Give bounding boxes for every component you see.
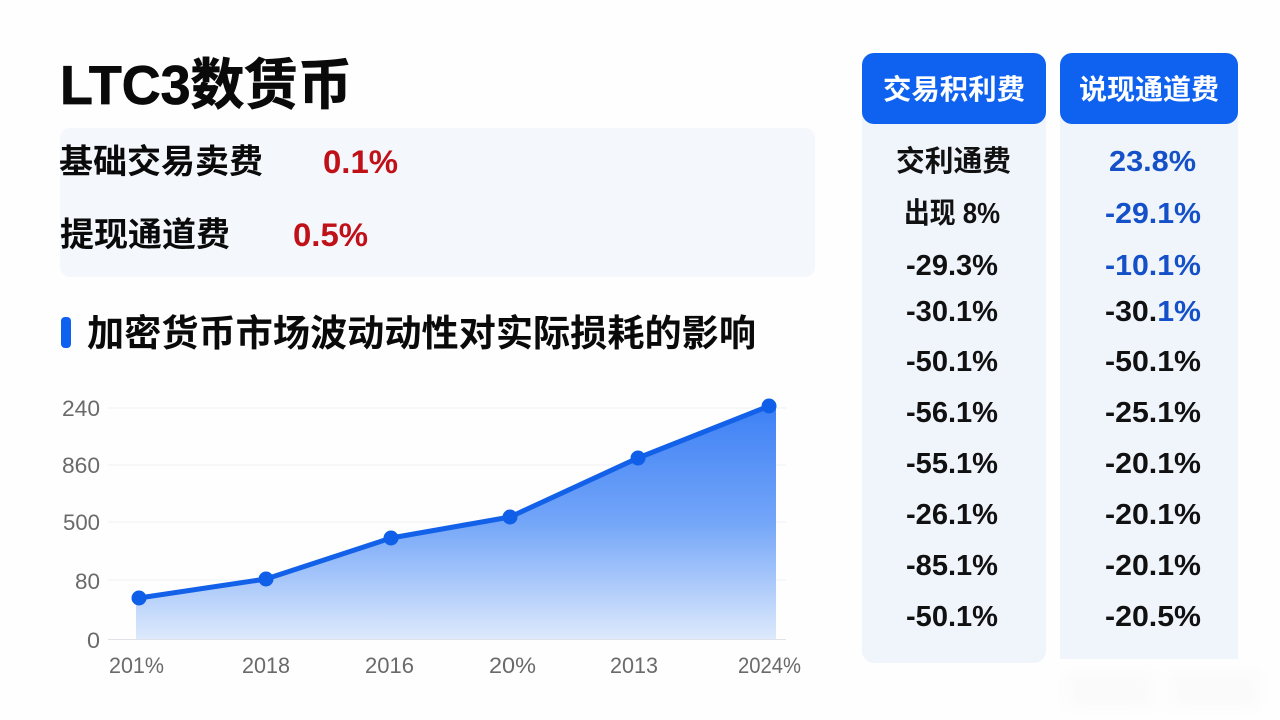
column header [1060, 53, 1238, 124]
text: withdrawal channel fee: 提现通道费 [60, 217, 230, 254]
column header: 说现通道费 [1079, 74, 1219, 105]
y axis labels: 500 [63, 510, 100, 535]
column values: -10.1% [1105, 250, 1201, 282]
column values: -30.1% [906, 296, 998, 328]
column values: -50.1% [1105, 346, 1201, 378]
column: withdrawal fee [1060, 53, 1238, 659]
x axis labels: 2024% [738, 653, 801, 678]
y axis labels: 0 [87, 628, 100, 653]
title: LTC3数赁币 [60, 54, 352, 116]
area fill [136, 406, 776, 640]
column values: -29.3% [906, 250, 998, 282]
y axis labels: 80 [75, 569, 100, 594]
column values: -56.1% [906, 397, 998, 429]
y axis labels: 240 [62, 396, 100, 421]
column values: -29.1% [1105, 198, 1201, 230]
x axis labels: 201% [109, 653, 164, 678]
text: withdrawal channel fee [60, 217, 368, 254]
column header [862, 53, 1046, 124]
y axis labels: 860 [62, 453, 100, 478]
column values: -25.1% [1105, 397, 1201, 429]
x axis labels: 2018 [242, 653, 290, 678]
x axis labels [109, 653, 801, 678]
column values: 交利通费 [896, 145, 1011, 178]
column values: 23.8% [1109, 146, 1196, 178]
column values: -85.1% [906, 550, 998, 582]
column values: -50.1% [906, 346, 998, 378]
column header: 交易积利费 [883, 74, 1025, 105]
y axis labels [62, 396, 100, 653]
column values: -55.1% [906, 448, 998, 480]
column values [896, 145, 1011, 633]
column values: -20.1% [1105, 550, 1201, 582]
heading: volatility section: 加密货币市场波动动性对实际损耗的影响 [87, 313, 756, 354]
data points [132, 398, 776, 606]
x axis labels: 2016 [365, 653, 414, 678]
text: withdrawal channel fee: 0.5% [293, 217, 368, 253]
column values: 出现 8% [904, 197, 1000, 230]
column values: -20.1% [1105, 499, 1201, 531]
trend line [139, 406, 769, 598]
x axis labels: 20% [489, 653, 536, 678]
text: base trading fee [59, 144, 398, 181]
column: trading fee [862, 53, 1046, 663]
column values: -20.5% [1105, 601, 1201, 633]
column values: -20.1% [1105, 448, 1201, 480]
x axis labels: 2013 [610, 653, 658, 678]
column values: -50.1% [906, 601, 998, 633]
column values: -30.1% [1105, 296, 1201, 328]
area chart [62, 396, 801, 678]
text: base trading fee: 0.1% [323, 144, 398, 180]
text: base trading fee: 基础交易卖费 [59, 144, 263, 181]
column values: -26.1% [906, 499, 998, 531]
panel: base fees [59, 128, 815, 277]
column values [1105, 146, 1201, 633]
